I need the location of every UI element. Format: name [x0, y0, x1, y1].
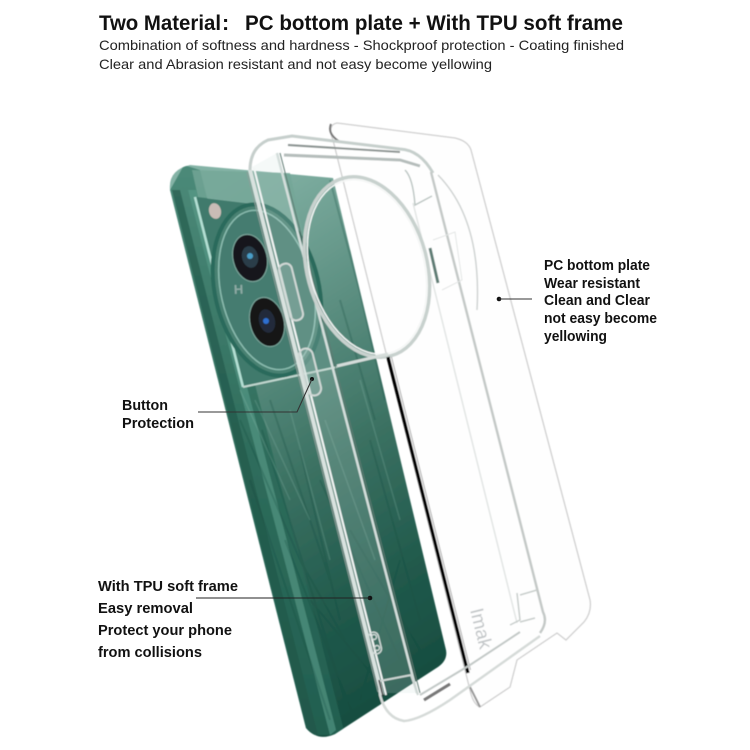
- side button on right: [430, 248, 438, 283]
- bottom corner bumper: [379, 636, 540, 721]
- case rail tint: [252, 153, 417, 693]
- callout: PC bottom plate: Clean and Clear: [544, 293, 650, 309]
- callout: PC bottom plate: Wear resistant: [544, 276, 640, 292]
- callout: PC bottom plate: not easy become: [544, 311, 657, 327]
- phone side strip: [170, 165, 345, 735]
- phone: [170, 165, 446, 737]
- callout: PC bottom plate: PC bottom plate: [544, 258, 650, 274]
- panel ledge: [337, 354, 388, 366]
- top frame: [250, 136, 433, 173]
- phone body: [170, 165, 446, 737]
- right rail: [431, 172, 545, 633]
- imak logo: Imak: [465, 606, 496, 652]
- callout: With TPU soft frame: With TPU soft frame: [98, 579, 238, 595]
- camera panel: [195, 197, 337, 387]
- callout: Button Protection: Button: [122, 398, 168, 414]
- inner rail: [277, 153, 417, 693]
- callout: With TPU soft frame: [98, 579, 372, 661]
- brand mark: H: [234, 282, 243, 297]
- back ring on plate: [438, 175, 478, 310]
- title: PC bottom plate + With TPU soft frame: [245, 11, 623, 35]
- callout: With TPU soft frame: Easy removal: [98, 601, 193, 617]
- power button: [297, 347, 323, 397]
- callout: PC bottom plate: [497, 258, 657, 345]
- camera opening ring: [285, 163, 449, 371]
- left rail: [250, 170, 382, 695]
- lens one: [228, 231, 272, 285]
- black edge line: [388, 357, 468, 673]
- callout: Button Protection: [122, 377, 314, 432]
- callout: PC bottom plate: yellowing: [544, 329, 607, 345]
- bottom right corner inner: [510, 590, 537, 625]
- callout: Button Protection: Protection: [122, 416, 194, 432]
- wood grain texture: [240, 180, 386, 720]
- charging port buttons: [367, 631, 383, 655]
- top panel texture: [192, 170, 305, 240]
- product illustration: [170, 123, 590, 737]
- back plate: PC bottom plate: [330, 123, 590, 707]
- top right corner inner: [405, 170, 432, 205]
- volume button: [278, 262, 304, 322]
- callout: With TPU soft frame: Protect your phone: [98, 623, 232, 639]
- subtitle line one: Combination of softness and hardness - Shockproof protection - Coating finished: [99, 37, 624, 53]
- clear TPU case: [247, 136, 545, 721]
- subtitle line two: Clear and Abrasion resistant and not easy become yellowing: [99, 56, 492, 72]
- lens two: [244, 294, 290, 350]
- title: Two Material: [99, 11, 221, 35]
- camera ring: [197, 194, 337, 386]
- title: [99, 11, 623, 35]
- camera flash: [207, 202, 223, 220]
- callout: With TPU soft frame: from collisions: [98, 645, 202, 661]
- title: :: [222, 11, 229, 35]
